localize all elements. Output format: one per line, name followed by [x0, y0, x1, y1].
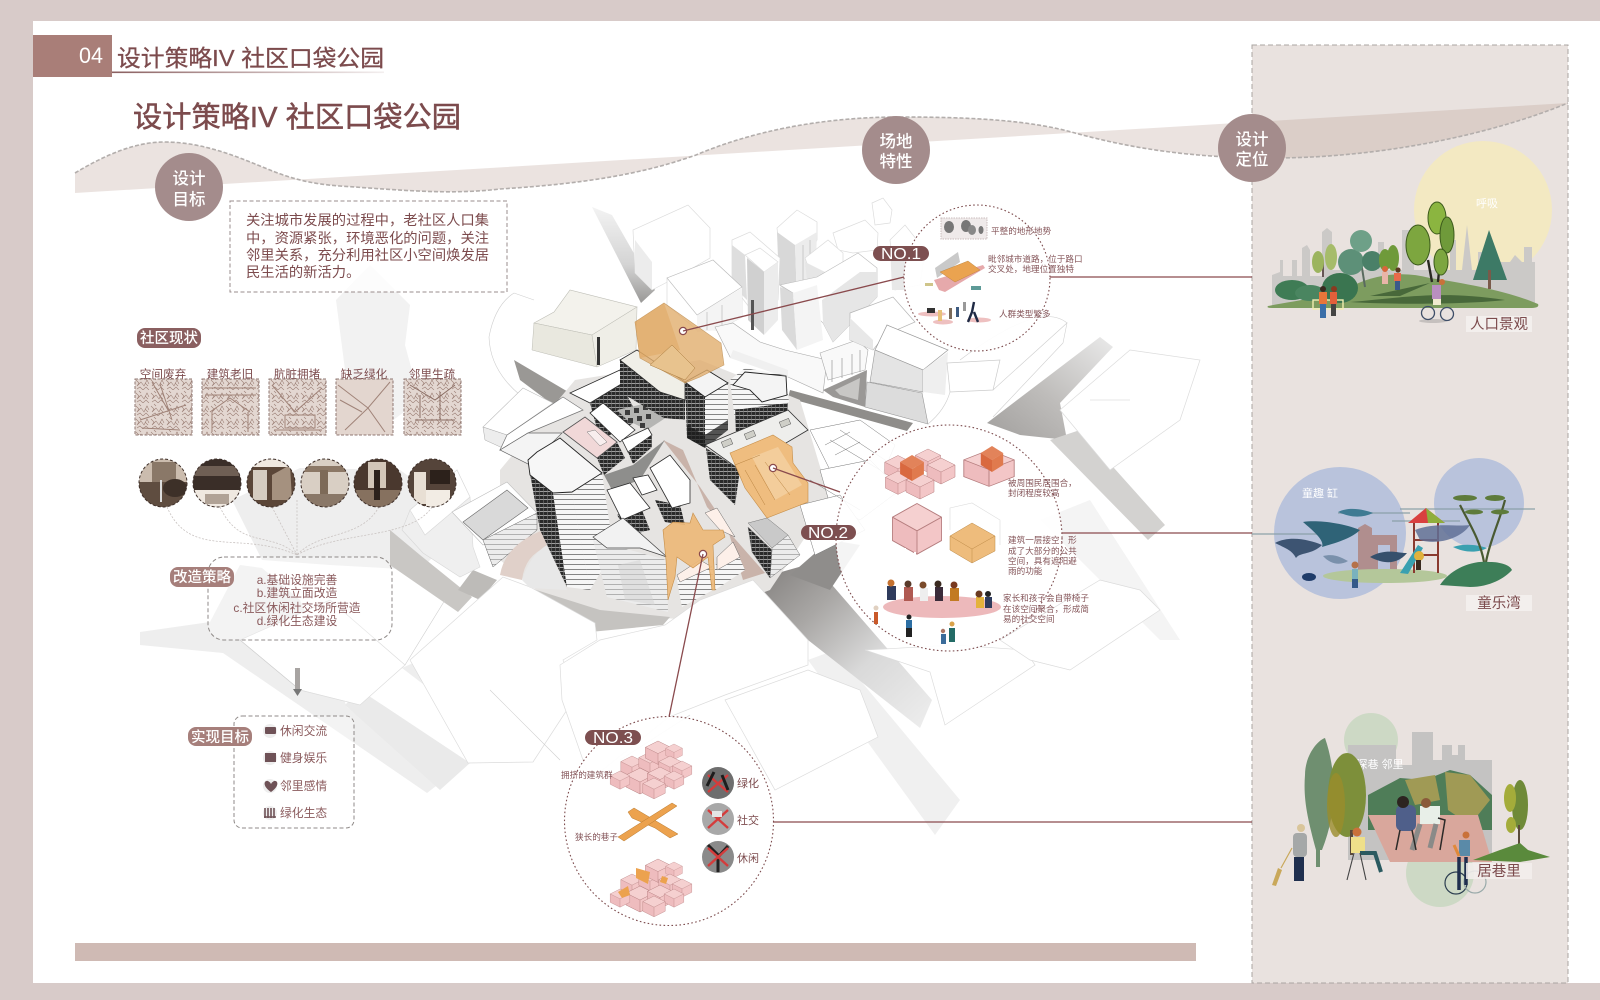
- label: [1466, 863, 1532, 880]
- design goal text box: 中，资源紧张，环境恶化的问题，关注: [246, 229, 489, 247]
- playground: [1323, 508, 1447, 583]
- icon: site at intersection: [925, 252, 985, 292]
- banana leaf: [1305, 738, 1334, 867]
- C-shaped block: [705, 368, 808, 505]
- stepped block: [667, 260, 868, 393]
- icon: no leisure: [702, 841, 759, 873]
- diagram: enclosed by homes: [885, 446, 1014, 499]
- renovation strategy box: a.基础设施完善: [257, 573, 338, 587]
- tile: estranged neighbours: 邻里生疏: [409, 367, 456, 381]
- design goal text box: [230, 201, 507, 292]
- badge: design goal: [155, 153, 223, 221]
- goals box: [188, 716, 354, 828]
- garden plants: [1368, 770, 1492, 830]
- goal: neighbourhood: 邻里感情: [280, 779, 327, 793]
- goal: leisure: 休闲交流: [280, 724, 327, 738]
- bench and couple: [1313, 286, 1343, 318]
- sketch tiles: [135, 367, 461, 435]
- callout NO.2: 空间，具有遮阳避: [1008, 555, 1077, 566]
- orange volume NO.3: [663, 513, 725, 600]
- badge: design positioning: 定位: [1236, 149, 1268, 169]
- callout NO.1: [873, 205, 1083, 351]
- badge: design positioning: [1218, 114, 1286, 182]
- far white block: [633, 205, 710, 290]
- tile: congested: 肮脏拥堵: [274, 367, 321, 381]
- tile: lack of greenery: 缺乏绿化: [341, 367, 388, 381]
- sepia photo circles: [139, 459, 456, 507]
- callout NO.2: [801, 425, 1089, 651]
- scene: lane neighbourhood: 深巷 邻里: [1356, 758, 1404, 771]
- wave band with dashed line: [75, 103, 1568, 193]
- photo 5: [354, 459, 402, 507]
- scene: lane neighbourhood: [1272, 713, 1550, 907]
- label: 人口景观: [1470, 316, 1528, 333]
- orange volume NO.1: [635, 303, 724, 383]
- section header: [33, 35, 384, 77]
- diagram: dense building cluster: [610, 741, 692, 799]
- icon: no greenery: 绿化: [737, 776, 759, 790]
- pill NO.3: [585, 730, 641, 747]
- tree: [1327, 753, 1366, 855]
- skyline: [1272, 225, 1535, 306]
- icon: no leisure: 休闲: [737, 851, 759, 865]
- main title: 设计策略IV 社区口袋公园: [133, 101, 461, 134]
- callout NO.2: 封闭程度较高: [1008, 487, 1060, 498]
- child: [1352, 562, 1358, 588]
- seated couple: [1396, 796, 1445, 850]
- leader lines: [669, 277, 1252, 822]
- large tower: [528, 438, 610, 590]
- label: 居巷里: [1477, 863, 1521, 880]
- icon: flat terrain trees: [941, 218, 987, 239]
- goal: fitness: 健身娱乐: [280, 751, 327, 765]
- tile: abandoned space: [135, 367, 192, 435]
- badge: design goal: 设计: [172, 169, 206, 188]
- orange volume NO.2: [730, 435, 808, 518]
- south block: [677, 508, 745, 607]
- trees: [1275, 202, 1507, 303]
- callout NO.3: 狭长的巷子: [575, 831, 618, 842]
- goals label: 实现目标: [191, 728, 249, 746]
- curved ground: [500, 530, 567, 590]
- people gathering: [874, 580, 1001, 644]
- pill NO.3: NO.3: [593, 730, 633, 747]
- tile: old buildings: 建筑老旧: [207, 367, 253, 381]
- renovation strategy box: c.社区休闲社交场所营造: [233, 601, 361, 615]
- scene: population landscape: 呼吸: [1476, 197, 1498, 210]
- scene: population landscape: [1268, 141, 1552, 333]
- diagram: pilotis: [892, 503, 1000, 563]
- design goal text box: 邻里关系，充分利用社区小空间焕发居: [246, 247, 489, 264]
- green circles: [1344, 713, 1398, 767]
- callout NO.3: 拥挤的建筑群: [561, 769, 613, 780]
- green hill: [1268, 274, 1538, 308]
- connector curves from photos: [167, 500, 432, 555]
- runners: [1382, 266, 1401, 290]
- callout NO.3: [561, 716, 774, 926]
- badge: design positioning: 设计: [1236, 130, 1268, 149]
- callout NO.2: 易的社交空间: [1003, 613, 1055, 624]
- icon: no greenery: [702, 767, 759, 799]
- north central buildings: [563, 350, 685, 490]
- pill NO.2: NO.2: [808, 525, 848, 542]
- callout NO.2: 建筑一层接空，形: [1008, 534, 1077, 545]
- tile: congested: [269, 367, 326, 435]
- design goal text box: 民生活的新活力。: [246, 264, 360, 281]
- people group: [918, 302, 991, 324]
- diagram: narrow lanes: [618, 803, 678, 841]
- label: [1466, 594, 1532, 612]
- main roads: [390, 207, 1165, 728]
- pill NO.2: [801, 525, 856, 542]
- tree and plants: [1440, 495, 1512, 587]
- grass: [1473, 843, 1550, 862]
- photo 4: [301, 459, 349, 507]
- woman with suitcase: [1272, 824, 1307, 886]
- patio: [1368, 815, 1492, 862]
- badge: site features: 场地: [880, 132, 912, 151]
- panel: design positioning background: [1252, 45, 1568, 983]
- pill NO.1: NO.1: [881, 246, 921, 263]
- badge: site features: [862, 116, 930, 184]
- label: 童乐湾: [1477, 594, 1521, 612]
- tile: old buildings: [202, 367, 259, 435]
- callout NO.1: 人群类型繁多: [999, 308, 1051, 319]
- curved striped block: [593, 518, 668, 612]
- cream building: [489, 290, 637, 395]
- callout NO.2: 被周围民居围合，: [1008, 477, 1077, 488]
- blue circles: [1274, 467, 1406, 599]
- big corner building: [850, 297, 1067, 424]
- tile: lack of greenery: [336, 367, 393, 435]
- far towers: [777, 198, 925, 300]
- design goal text box: 关注城市发展的过程中，老社区人口集: [246, 212, 489, 229]
- yellow sun circle: [1414, 141, 1552, 279]
- tall towers: [732, 232, 877, 350]
- callout NO.2: 家长和孩子会自带椅子: [1003, 592, 1089, 603]
- cyclist: [1419, 279, 1454, 323]
- photo 2: [193, 459, 241, 507]
- icon: no social: 社交: [737, 813, 759, 827]
- callout NO.2: 成了大部分的公共: [1008, 545, 1077, 556]
- streaks: [1252, 509, 1535, 534]
- tile: estranged neighbours: [404, 367, 461, 435]
- callout NO.2: 在该空间聚合，形成简: [1003, 603, 1089, 614]
- scene: children's bay: [1252, 458, 1535, 612]
- right tree: [1504, 780, 1528, 850]
- section title: 设计策略IV 社区口袋公园: [117, 45, 384, 71]
- whales: [1275, 509, 1487, 581]
- section number: 04: [79, 43, 103, 68]
- bottom bar: [75, 943, 1196, 961]
- city axonometric model: [140, 198, 1200, 835]
- community status label: 社区现状: [140, 330, 198, 347]
- large white blocks: [240, 350, 1200, 790]
- badge: design goal: 目标: [172, 190, 206, 209]
- arrow: strategy to goals: [293, 668, 302, 696]
- diagram: overlay cluster and lanes: [610, 859, 692, 917]
- badge: site features: 特性: [880, 152, 912, 171]
- east small buildings: [748, 420, 900, 578]
- west strip blocks: [483, 388, 583, 465]
- cyclist: [1445, 832, 1486, 894]
- skyline: [1348, 732, 1492, 860]
- west low building: [452, 482, 537, 567]
- tower with dark facade: [685, 370, 728, 448]
- renovation strategy box: b.建筑立面改造: [257, 586, 338, 600]
- renovation strategy box: d.绿化生态建设: [257, 614, 338, 628]
- goal: ecology: 绿化生态: [280, 806, 327, 820]
- alley: [663, 440, 765, 580]
- photo 1: [139, 459, 187, 507]
- callout NO.2: 雨的功能: [1008, 565, 1043, 576]
- sitting person: [1347, 828, 1381, 880]
- site markers: [679, 327, 777, 558]
- callout NO.1: 交叉处，地理位置独特: [988, 263, 1074, 274]
- middle low blocks: [607, 455, 690, 535]
- north-east tower group: [633, 198, 1067, 424]
- tile: abandoned space: 空间废弃: [140, 367, 186, 381]
- callout NO.1: 平整的地形地势: [991, 225, 1052, 236]
- callout NO.1: 毗邻城市道路，位于路口: [988, 253, 1083, 264]
- strategy label: 改造策略: [173, 569, 231, 586]
- icon: no social: [702, 803, 759, 835]
- scene: children's bay: 童趣 缸: [1302, 486, 1338, 500]
- renovation strategy box: [170, 557, 392, 640]
- photo 6: [408, 459, 456, 507]
- pill NO.1: [873, 246, 929, 263]
- faint surrounding roads: [140, 265, 1180, 835]
- photo 3: [247, 459, 295, 507]
